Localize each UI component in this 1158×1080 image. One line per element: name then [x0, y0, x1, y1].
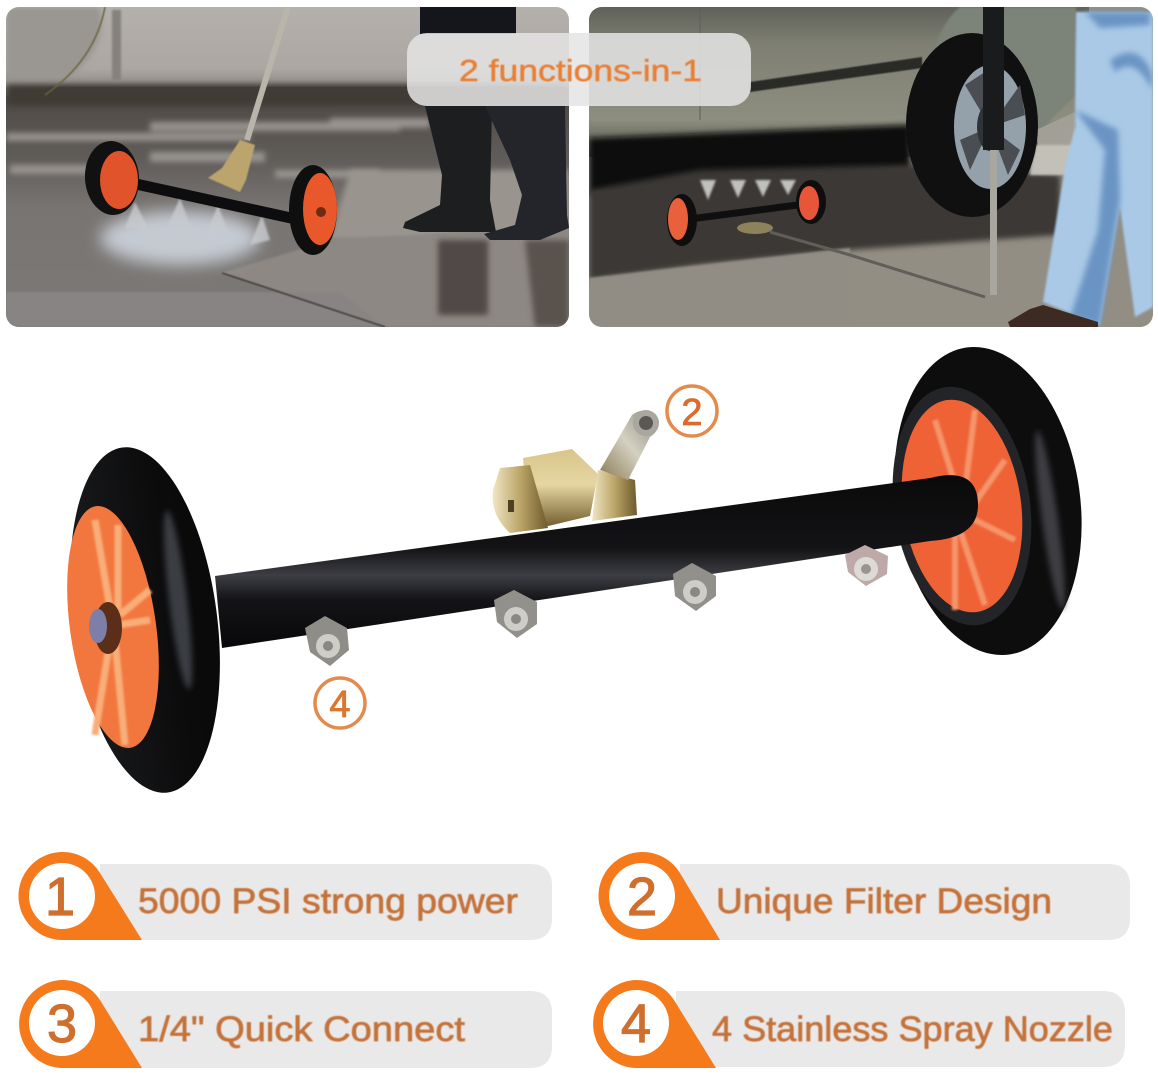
- right wheel: [289, 165, 337, 255]
- boots: [403, 7, 569, 240]
- title pill: [407, 33, 751, 106]
- left wheel: [84, 141, 139, 215]
- callout 2: [667, 386, 717, 436]
- feature 1: [18, 852, 552, 940]
- feature 2: 2: [627, 867, 657, 927]
- callout 4: [315, 678, 365, 728]
- right wheel: [875, 335, 1101, 667]
- shoe: [1008, 305, 1098, 327]
- pole: [983, 7, 1004, 295]
- car rim: [954, 65, 1026, 189]
- boot reflections: [438, 240, 569, 327]
- brass connector: [208, 140, 255, 192]
- title text: 2 functions-in-1: [459, 53, 702, 88]
- feature 3: 3: [47, 994, 77, 1054]
- lance: [770, 232, 985, 297]
- jeans: [1043, 12, 1153, 325]
- spray mist: [100, 198, 270, 265]
- brass filter connector: [493, 410, 659, 533]
- product: under-carriage cleaner: [51, 335, 1101, 802]
- label: 5000 PSI strong power: [138, 882, 518, 921]
- feature 2: [598, 852, 1130, 940]
- car tyre: [906, 33, 1038, 217]
- feature 4: [593, 980, 1125, 1068]
- cleaner tube: [118, 180, 300, 220]
- tube: [215, 475, 978, 648]
- label: Unique Filter Design: [716, 882, 1052, 921]
- feature 4: 4: [621, 994, 651, 1054]
- feature 3: [19, 980, 552, 1068]
- callout 2: 2: [681, 392, 703, 434]
- lance: [244, 28, 284, 141]
- nozzles: [305, 545, 888, 666]
- left wheel: [51, 438, 239, 802]
- callout 4: 4: [329, 684, 351, 726]
- panel: photo of cleaner on wet concrete floor: [6, 7, 569, 327]
- small cleaner under car: [667, 180, 826, 246]
- panel: photo of cleaner under a car: [589, 7, 1153, 327]
- feature 1: 1: [45, 867, 75, 927]
- label: 1/4" Quick Connect: [138, 1010, 465, 1049]
- label: 4 Stainless Spray Nozzle: [712, 1010, 1113, 1049]
